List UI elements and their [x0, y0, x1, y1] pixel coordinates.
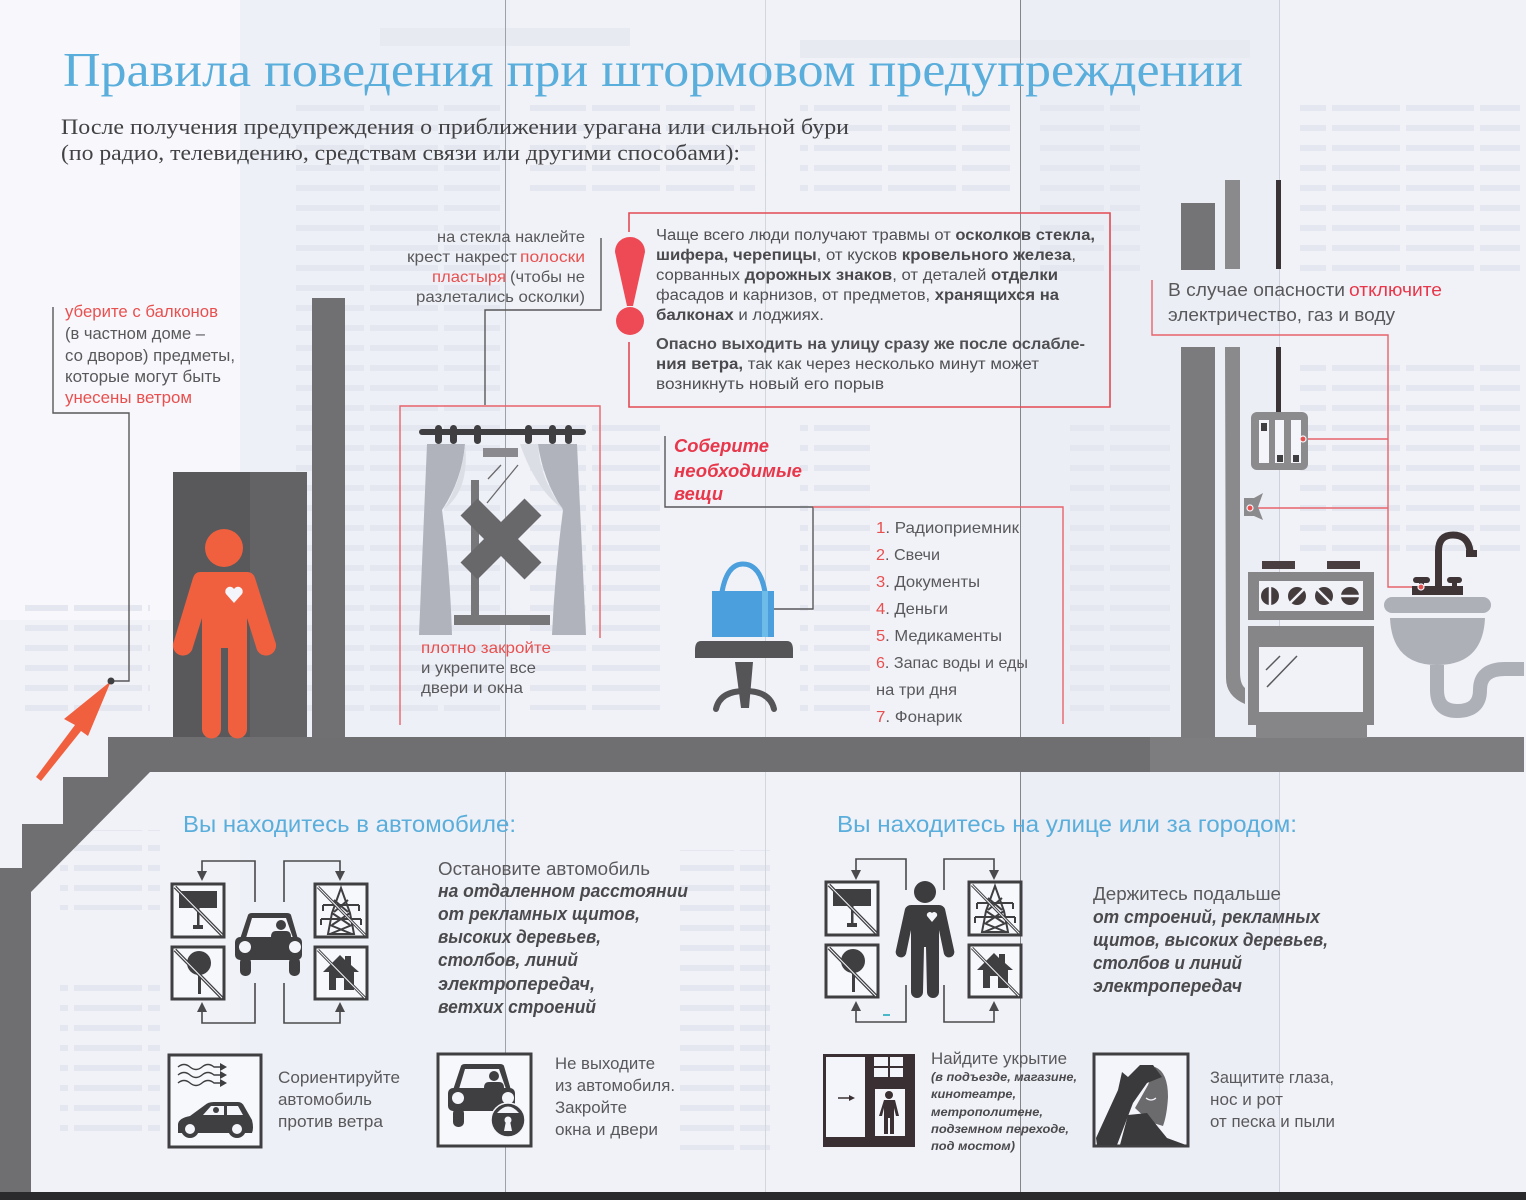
- window frame callout: и укрепите все: [421, 660, 536, 677]
- text: find shelter: метрополитене,: [931, 1105, 1043, 1119]
- icon: electrical switch: [1251, 412, 1308, 470]
- text: stay in the car: из автомобиля.: [555, 1076, 675, 1095]
- text: protect eyes: [1210, 1068, 1335, 1131]
- callout: shut off utilities: В случае опасности: [1168, 280, 1345, 300]
- list of items: 6. Запас воды и еды: [876, 655, 1028, 672]
- list of items: 4. Деньги: [876, 601, 948, 618]
- icon: exclamation mark: [615, 237, 645, 335]
- person in red: [173, 529, 276, 738]
- callout: gather items: [665, 436, 1063, 724]
- text: protect eyes: Защитите глаза,: [1210, 1068, 1334, 1087]
- text: keep away: Держитесь подальше: [1093, 884, 1281, 904]
- text: stop the car: столбов, линий: [438, 950, 578, 970]
- warning panel: сорванных дорожных знаков , от деталей отделки: [656, 267, 1058, 284]
- callout: tape windows: полоски: [520, 249, 585, 266]
- callout: remove from balconies: (в частном доме –: [65, 324, 206, 343]
- warning panel: балконах и лоджиях.: [656, 307, 824, 324]
- text: stop the car: на отдаленном расстоянии: [438, 881, 688, 901]
- text: keep away: щитов, высоких деревьев,: [1093, 930, 1328, 950]
- text: stop the car: [438, 859, 688, 1017]
- window frame callout: [400, 406, 600, 725]
- wall, gas pipe and cable: [1181, 180, 1281, 738]
- icon: gas stove: [1248, 561, 1374, 738]
- text: stay in the car: Закройте: [555, 1098, 627, 1117]
- text: find shelter: кинотеатре,: [931, 1087, 1016, 1101]
- arrow: wind direction: [36, 678, 114, 781]
- callout: remove from balconies: которые могут быть: [65, 367, 221, 386]
- list of items: 3. Документы: [876, 574, 980, 591]
- callout: gather items: Соберите: [674, 436, 769, 456]
- callout: shut off utilities: отключите: [1349, 280, 1442, 300]
- text: stay in the car: Не выходите: [555, 1054, 655, 1073]
- title: Правила поведения при штормовом предупреждении: [63, 42, 1243, 97]
- text: stay in the car: [555, 1054, 675, 1139]
- callout: gather items: необходимые: [674, 461, 802, 481]
- callout: remove from balconies: уберите с балконов: [65, 302, 218, 321]
- list of items: 5. Медикаменты: [876, 628, 1002, 645]
- subtitle: (по радио, телевидению, средствам связи или другими способами):: [61, 140, 740, 165]
- text: keep away: столбов и линий: [1093, 953, 1242, 973]
- text: keep away: электропередач: [1093, 976, 1242, 996]
- warning panel: Чаще всего люди получают травмы от осколков стекла,: [656, 227, 1095, 244]
- callout: shut off utilities: [1152, 280, 1442, 587]
- callout: tape windows: крест накрест: [407, 249, 518, 266]
- text: stop the car: от рекламных щитов,: [438, 904, 640, 924]
- subtitle: После получения предупреждения о приближении урагана или сильной бури: [61, 114, 849, 139]
- window frame callout: двери и окна: [421, 680, 523, 697]
- text: stop the car: Остановите автомобиль: [438, 859, 650, 879]
- text: find shelter: Найдите укрытие: [931, 1049, 1067, 1068]
- icon: person covering face: [1094, 1054, 1188, 1146]
- text: find shelter: под мостом): [931, 1139, 1015, 1153]
- callout: gather items: вещи: [674, 484, 723, 504]
- text: protect eyes: нос и рот: [1210, 1090, 1283, 1109]
- text: find shelter: [931, 1049, 1077, 1153]
- heading: in the car: Вы находитесь в автомобиле:: [183, 811, 516, 837]
- callout: remove from balconies: унесены ветром: [65, 388, 192, 407]
- icon: shelter: [823, 1054, 915, 1147]
- icon: car against the wind: [169, 1055, 261, 1147]
- text: stop the car: высоких деревьев,: [438, 927, 601, 947]
- text: stop the car: электропередач,: [438, 974, 595, 994]
- warning panel: фасадов и карнизов, от предметов, хранящихся на: [656, 287, 1059, 304]
- callout: remove from balconies: со дворов) предметы,: [65, 346, 235, 365]
- icon: bag on stool: [695, 564, 793, 709]
- warning panel: возникнуть новый его порыв: [656, 376, 884, 393]
- warning panel: [615, 213, 1110, 407]
- window frame callout: плотно закройте: [421, 640, 551, 657]
- text: find shelter: подземном переходе,: [931, 1122, 1069, 1136]
- warning panel: шифера, черепицы , от кусков кровельного железа ,: [656, 247, 1076, 264]
- text: keep away: от строений, рекламных: [1093, 907, 1321, 927]
- text: stop the car: ветхих строений: [438, 997, 596, 1017]
- callout: tape windows: [407, 229, 601, 405]
- list of items: 1. Радиоприемник: [876, 520, 1020, 537]
- subtitle: [61, 114, 849, 165]
- callout: tape windows: на стекла наклейте: [437, 229, 585, 246]
- panel: street hazards diagram: [826, 859, 1021, 1022]
- callout: remove from balconies: [53, 302, 235, 681]
- icon: locked car: [438, 1054, 531, 1146]
- text: stay in the car: окна и двери: [555, 1120, 658, 1139]
- text: find shelter: (в подъезде, магазине,: [931, 1070, 1077, 1084]
- heading: on the street: Вы находитесь на улице или за городом:: [837, 811, 1297, 837]
- balcony door and wall: [173, 298, 345, 738]
- window with curtains and taped cross: [419, 425, 586, 635]
- list of items: на три дня: [876, 682, 957, 699]
- text: orient the car: автомобиль: [278, 1090, 372, 1109]
- text: orient the car: Сориентируйте: [278, 1068, 400, 1087]
- text: orient the car: против ветра: [278, 1112, 384, 1131]
- callout: tape windows: (чтобы не: [510, 269, 585, 286]
- text: protect eyes: от песка и пыли: [1210, 1112, 1335, 1131]
- callout: shut off utilities: электричество, газ и воду: [1168, 305, 1395, 325]
- icon: sink and faucet: [1384, 535, 1524, 711]
- text: keep away: [1093, 884, 1328, 996]
- list of items: 7. Фонарик: [876, 709, 963, 726]
- text: orient the car: [278, 1068, 400, 1131]
- icon: gas valve: [1244, 493, 1263, 520]
- floor and staircase: [0, 737, 1524, 1192]
- callout: tape windows: разлетались осколки): [416, 289, 585, 306]
- list of items: 2. Свечи: [876, 547, 940, 564]
- panel: car hazards diagram: [172, 861, 367, 1023]
- warning panel: ния ветра, так как через несколько минут может: [656, 356, 1039, 373]
- list of items: [876, 520, 1028, 726]
- callout: tape windows: пластыря: [432, 269, 506, 286]
- warning panel: Опасно выходить на улицу сразу же после ослабле-: [656, 336, 1085, 353]
